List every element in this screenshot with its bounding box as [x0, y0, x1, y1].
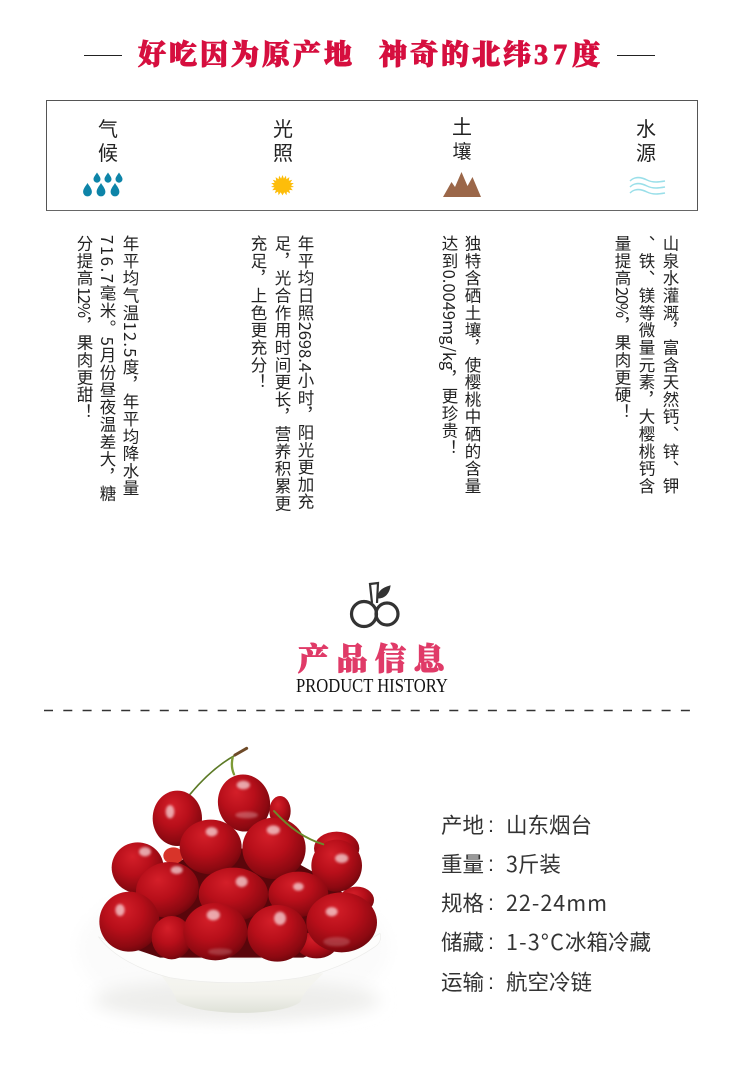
spec: storage: 1-3°C冰箱冷藏 — [506, 926, 651, 957]
label: water — [636, 113, 656, 166]
text: climate description — [73, 235, 143, 503]
text: sunlight description: 充足，上色更充分！ — [247, 235, 271, 391]
spec: size: 22-24mm — [506, 887, 608, 918]
spec: origin: : — [488, 813, 494, 837]
label: climate: 候 — [98, 137, 118, 166]
label: climate — [98, 113, 118, 166]
spec: shipping — [441, 966, 592, 997]
icon: cherry logo — [350, 582, 400, 628]
spec: size: 规格 — [441, 887, 484, 918]
stems — [190, 748, 247, 794]
label: soil — [452, 111, 472, 164]
spec: storage: : — [488, 930, 494, 954]
spec: size: : — [488, 891, 494, 915]
photo: bowl of cherries — [98, 746, 381, 1023]
text: soil description — [438, 235, 485, 495]
spec: shipping: 运输 — [441, 966, 484, 997]
label: sunlight: 照 — [273, 137, 293, 166]
text: water description: 量提高 20% ，果肉更硬！ — [611, 235, 635, 421]
backdrop haze — [77, 875, 390, 1022]
label: sunlight — [273, 113, 293, 166]
heading: product info: 产品信息 — [298, 634, 452, 679]
highlights — [115, 781, 350, 955]
spec: weight: : — [488, 852, 494, 876]
text: climate description: 716.7 毫米。5月份昼夜温差大，糖 — [96, 235, 120, 503]
subheading: product history: PRODUCT HISTORY — [296, 676, 448, 697]
text: sunlight description: 足，光合作用时间更长，营养积累更 — [271, 235, 295, 512]
spec: weight: 重量 — [441, 848, 484, 879]
second stem — [274, 811, 323, 844]
text: climate description: 年平均气温 12.5 度，年平均降水量 — [119, 235, 143, 497]
icon: mountains — [443, 172, 481, 197]
spec: origin: 山东烟台 — [506, 809, 592, 840]
spec: weight — [441, 848, 561, 879]
spec: storage: 储藏 — [441, 926, 484, 957]
title right part: 神奇的北纬37度 — [379, 40, 603, 71]
text: water description: 山泉水灌溉，富含天然钙、锌、钾 — [659, 235, 683, 495]
spec: storage — [441, 926, 651, 957]
text: water description: 、铁、镁等微量元素，大樱桃钙含 — [635, 235, 659, 495]
icon: rain drops — [83, 172, 122, 196]
back cherries — [99, 770, 377, 962]
text: climate description: 分提高 12% ，果肉更甜！ — [73, 235, 97, 421]
bowl — [98, 933, 381, 1013]
label: sunlight: 光 — [273, 113, 293, 142]
bowl shadow — [93, 979, 380, 1021]
text: soil description: 独特含硒土壤，使樱桃中硒的含量 — [461, 235, 485, 495]
icon: water waves — [630, 176, 666, 195]
label: climate: 气 — [98, 113, 118, 142]
spec: size — [441, 887, 608, 918]
spec: origin: 产地 — [441, 809, 484, 840]
text: water description — [611, 235, 683, 495]
label: soil: 壤 — [452, 137, 472, 164]
spec: origin — [441, 809, 592, 840]
panel: four factors box — [46, 100, 698, 211]
text: sunlight description: 年平均日照 2698.4 小时，阳光更加充 — [294, 235, 318, 511]
label: water: 水 — [636, 113, 656, 142]
label: soil: 土 — [452, 111, 472, 140]
text: soil description: 达到 0.0049mg/kg ，更珍贵！ — [438, 235, 462, 457]
title left part: 好吃因为原产地 — [138, 40, 355, 71]
text: sunlight description — [247, 235, 318, 512]
spec: shipping: 航空冷链 — [506, 966, 592, 997]
label: water: 源 — [636, 137, 656, 166]
dark gap filling behind cherries — [113, 845, 370, 958]
dashed divider — [44, 710, 690, 712]
spec: shipping: : — [488, 970, 494, 994]
spec: weight: 3斤装 — [506, 848, 561, 879]
icon: sun — [271, 175, 294, 196]
